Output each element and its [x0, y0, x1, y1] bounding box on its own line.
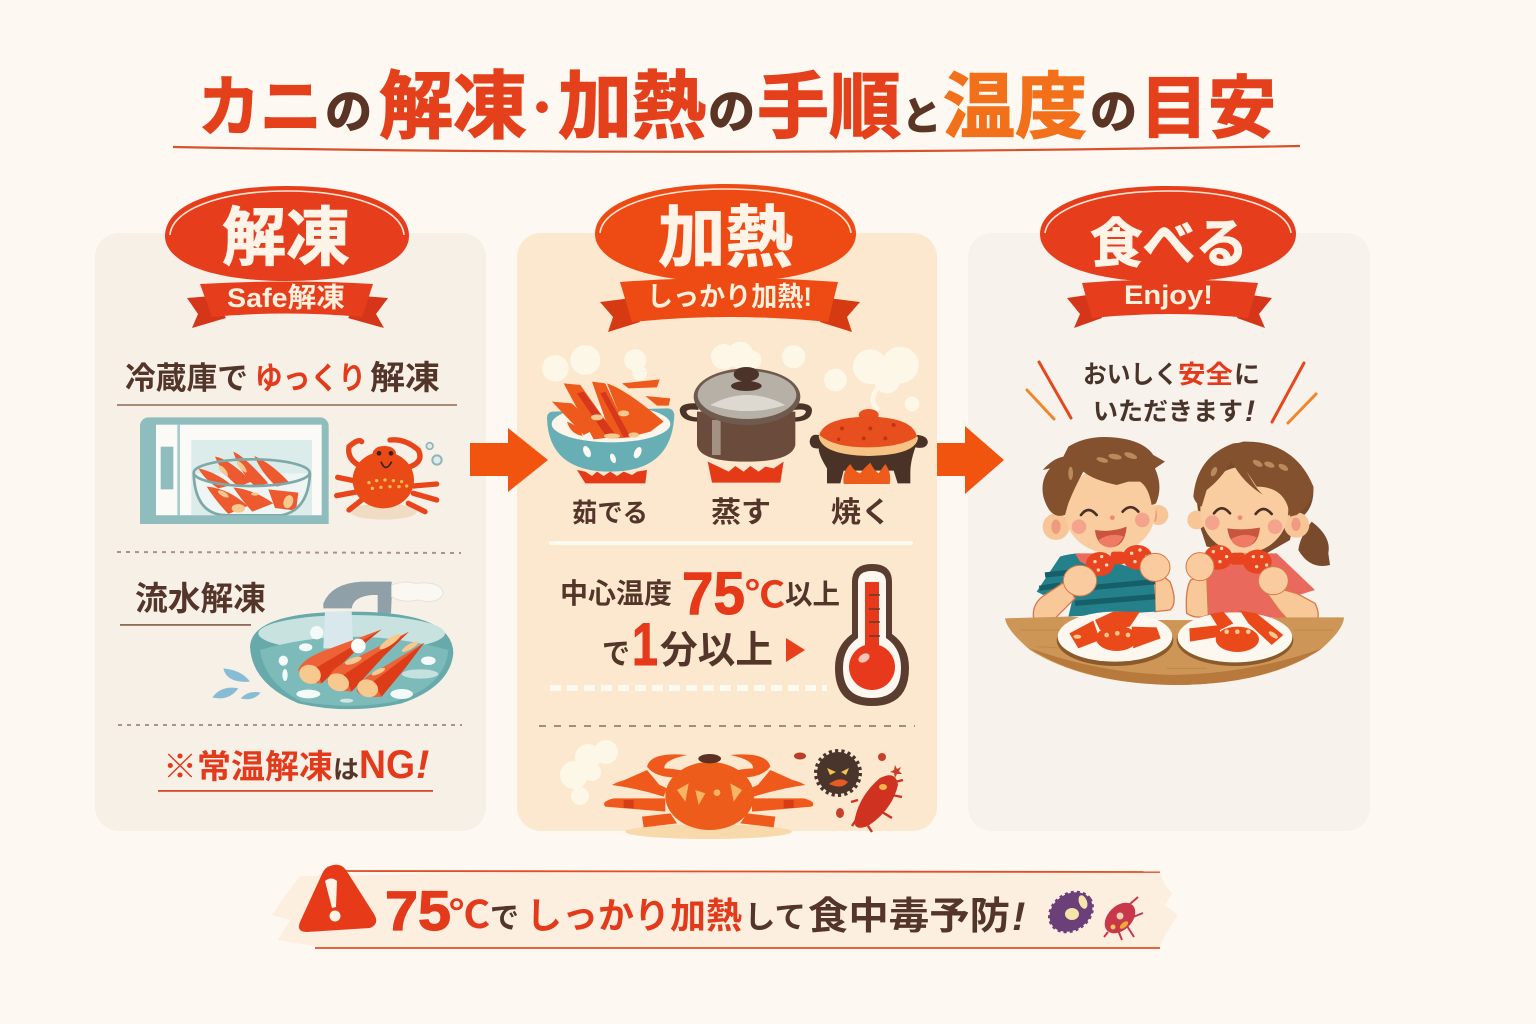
- text: eat safely: に: [1234, 361, 1260, 389]
- badge: thaw: [165, 186, 409, 328]
- text: core temperature: 中心温度: [560, 578, 672, 609]
- title: 解凍: [379, 65, 527, 148]
- text: bottom warning: ℃: [449, 895, 490, 937]
- icon: faucet and bowl of crab legs: [212, 582, 453, 709]
- icon: germ: [817, 752, 859, 794]
- warning text: room temperature thaw NG: [158, 743, 433, 792]
- badge: heat: 加熱: [658, 201, 793, 276]
- title: 手順: [757, 68, 901, 148]
- icon: refrigerator with crab legs: [140, 417, 329, 524]
- warning text: room temperature thaw NG: ※常温解凍: [163, 748, 333, 785]
- label: steam: 蒸す: [711, 496, 771, 529]
- text: bottom warning: して: [744, 900, 806, 935]
- icon: steam pot: [680, 342, 812, 483]
- heading: fridge thaw: [117, 359, 457, 406]
- title: の: [1090, 85, 1137, 138]
- text: eat safely: おいしく: [1083, 361, 1178, 389]
- text: bottom warning: !: [1012, 895, 1025, 939]
- warning text: room temperature thaw NG: !: [416, 743, 429, 787]
- title: 温度: [943, 68, 1087, 148]
- heading: running water thaw: 流水解凍: [135, 580, 266, 617]
- title: 目安: [1140, 71, 1276, 147]
- arrow: heat to eat: [937, 426, 1004, 494]
- text: core temperature: 75: [682, 560, 745, 627]
- icon: small crab: [337, 440, 442, 520]
- text: bottom warning: で: [490, 902, 519, 935]
- text: eat safely: [1083, 361, 1260, 428]
- text: core temperature: ℃: [745, 574, 785, 615]
- bottom banner: [272, 871, 1178, 948]
- label: grill: 焼く: [831, 496, 891, 529]
- title: 加熱: [558, 65, 706, 148]
- text: bottom warning: [385, 879, 1025, 942]
- icon: steam clouds: [560, 740, 618, 805]
- icon: warning triangle: [299, 865, 376, 932]
- text: core temperature: 1: [632, 611, 658, 678]
- icon: big cooked crab: [604, 754, 813, 839]
- icon: thermometer: [835, 564, 909, 706]
- title: [198, 65, 1276, 148]
- decorative burst lines: [1027, 362, 1316, 423]
- text: eat safely: !: [1245, 395, 1255, 428]
- text: bottom warning: 75: [385, 879, 451, 942]
- badge: eat: Enjoy!: [1124, 280, 1213, 310]
- panel: heat: [517, 233, 937, 831]
- title: ・: [522, 87, 562, 131]
- title: の: [325, 85, 372, 138]
- badge: thaw: Safe解凍: [227, 283, 345, 313]
- warning text: room temperature thaw NG: NG: [359, 743, 415, 787]
- title: の: [708, 85, 755, 138]
- illustration: boy eating crab: [1033, 437, 1174, 625]
- icon: red germ: [1099, 897, 1143, 940]
- text: eat safely: いただきます: [1093, 398, 1243, 426]
- heading: fridge thaw: 冷蔵庫で: [125, 361, 248, 396]
- heading: fridge thaw: 解凍: [370, 359, 440, 396]
- badge: eat: [1040, 186, 1296, 328]
- icon: small spot: [794, 752, 806, 760]
- text: core temperature: [560, 560, 840, 678]
- badge: heat: [595, 184, 860, 332]
- text: eat safely: 安全: [1178, 361, 1233, 389]
- warning text: room temperature thaw NG: は: [333, 756, 359, 784]
- text: bottom warning: しっかり加熱: [526, 895, 742, 936]
- illustration: girl eating crab: [1186, 442, 1330, 627]
- icon: boil bowl: [542, 345, 674, 483]
- icon: grill: [810, 347, 928, 484]
- text: core temperature: 以上: [785, 579, 840, 610]
- text: core temperature: 分以上: [660, 630, 773, 672]
- text: bottom warning: 食中毒予防: [808, 896, 1010, 938]
- badge: eat: 食べる: [1090, 215, 1248, 274]
- badge: heat: しっかり加熱!: [647, 282, 812, 312]
- label: boil: 茹でる: [572, 498, 648, 528]
- icon: purple germ: [1042, 884, 1100, 940]
- badge: thaw: 解凍: [222, 202, 350, 274]
- icon: bacteria: [836, 753, 903, 832]
- title: カニ: [198, 70, 322, 144]
- panel: eat: [968, 233, 1370, 831]
- heading: fridge thaw: ゆっくり: [255, 361, 366, 396]
- title: と: [902, 96, 941, 139]
- arrow: thaw to heat: [470, 428, 548, 492]
- panel: thaw: [95, 233, 486, 831]
- illustration: table with crab plates: [1005, 611, 1344, 685]
- text: core temperature: で: [602, 638, 630, 671]
